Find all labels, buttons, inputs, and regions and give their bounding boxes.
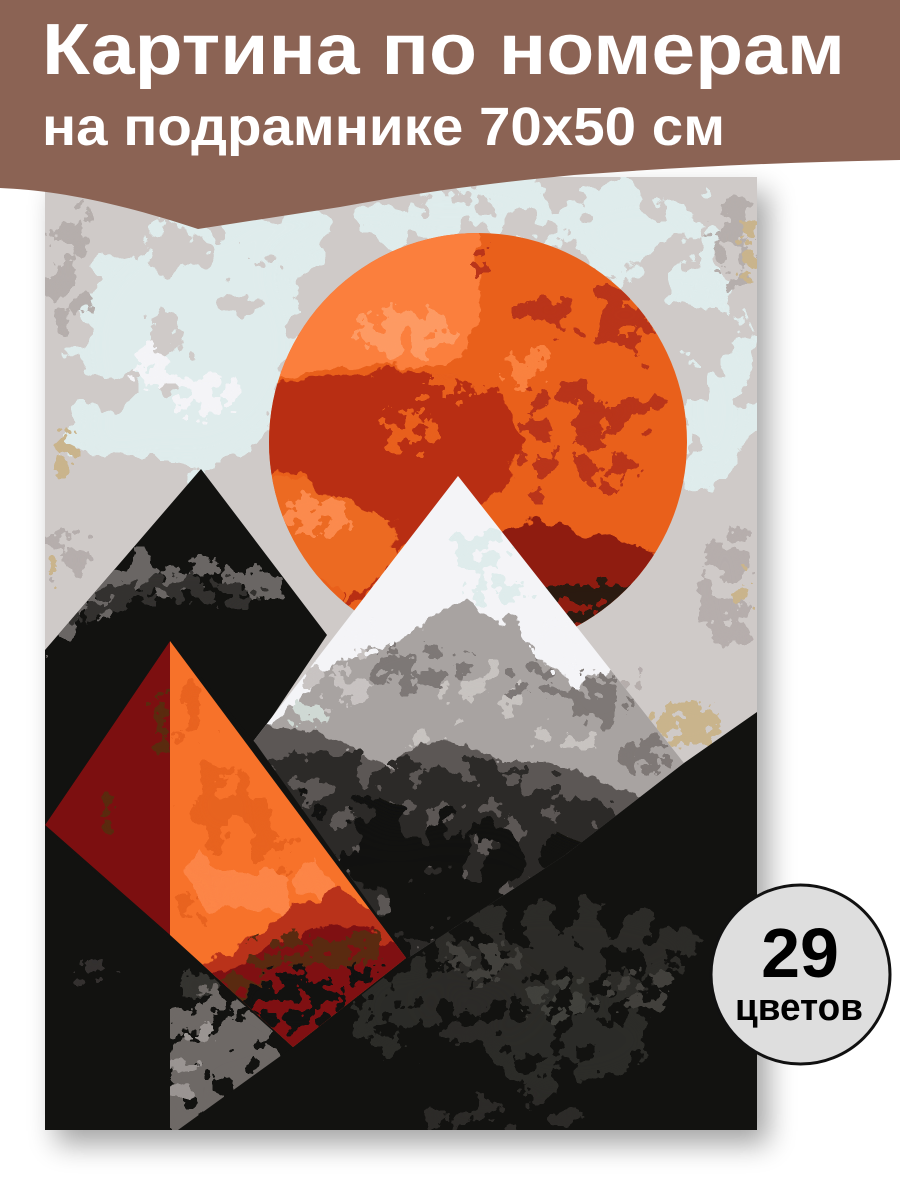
badge circle [711,885,890,1064]
sun orange flecks in red band [375,376,490,456]
sun lower-left orange [260,475,397,600]
sky background [45,177,757,763]
pyramid brown flecks [215,930,385,1008]
sky white highlights [130,341,239,419]
wedge light grey [167,1021,223,1102]
foreground body [45,700,757,1130]
black mountain [45,469,327,900]
sky ochre accents [45,218,760,751]
sun red band [260,370,520,615]
subtitle: на подрамнике 70х50 см [42,97,725,157]
peak pale-blue flecks [450,530,535,604]
pyramid [45,635,420,1060]
sky grey mottling [44,180,759,720]
sun lowest dark flecks [545,576,635,624]
dark band black core [200,796,640,975]
painting canvas [44,167,763,1143]
orange light area [171,820,335,928]
badge number: 29 [761,914,839,992]
dark forest band [240,726,690,990]
foreground smoke texture [350,902,700,1135]
foreground dark hills [45,700,757,1135]
sky pale blue clouds [65,167,763,495]
pyramid red face [45,641,172,935]
black mountain body [45,469,327,900]
sun upper-left light orange [280,233,482,379]
sun [269,233,687,626]
sun pale highlights [353,306,549,387]
black mountain outer mist [46,546,285,658]
pyramid backing shade [45,641,406,1047]
title: Картина по номерам [42,10,845,90]
small flecks lower left [70,961,120,989]
slope pale green flecks [290,696,326,728]
black mountain inner mist [60,575,270,630]
slope darker mottling [360,642,673,781]
pyramid orange face [165,635,420,1060]
pyramid black flecks [240,959,387,1032]
dark band mid tones [240,747,680,985]
wedge mid grey [150,992,295,1143]
foreground smoke highlights [440,936,676,1024]
sun mottling over right side [464,239,670,498]
sun base orange [269,233,687,626]
badge: 29 colours [711,885,890,1064]
red face brown flecks [102,680,172,841]
slope lighter mottling [300,650,610,758]
pyramid dark red base [205,925,420,1060]
slope white patches [364,620,573,675]
middle mountain [254,476,684,958]
header banner [0,0,900,229]
grey slope [271,598,684,816]
pyramid red base [165,890,410,1060]
wedge dark mottling [169,955,221,1015]
canvas drop shadow [56,192,768,1144]
sun lower dark band [502,515,656,626]
snowy peak [254,476,684,763]
wedge dark base [165,935,300,1135]
badge label: цветов [735,987,863,1029]
orange darker mottling [170,680,298,927]
grey mist wedge lower left [150,935,300,1143]
